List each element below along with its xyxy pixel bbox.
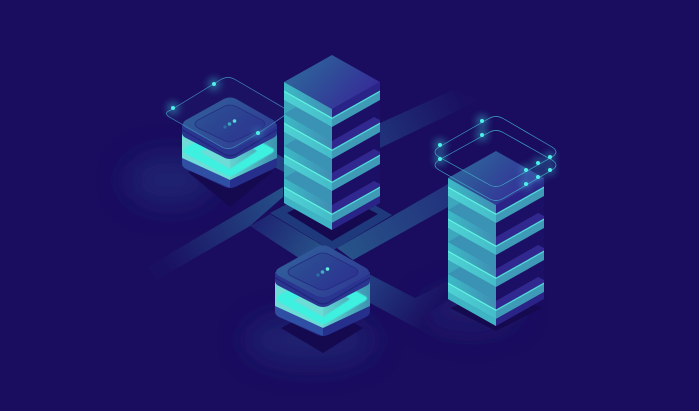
floor connection roads [147, 90, 480, 337]
server tower right [448, 151, 544, 326]
floating plate over top-left box [166, 78, 288, 148]
glowing node dots [167, 78, 555, 189]
server box top-left [182, 98, 277, 188]
server tower left [284, 55, 380, 230]
shadows [188, 150, 542, 353]
floating plates over right tower [435, 116, 556, 200]
server box bottom [275, 246, 370, 336]
floor glows [125, 154, 520, 366]
